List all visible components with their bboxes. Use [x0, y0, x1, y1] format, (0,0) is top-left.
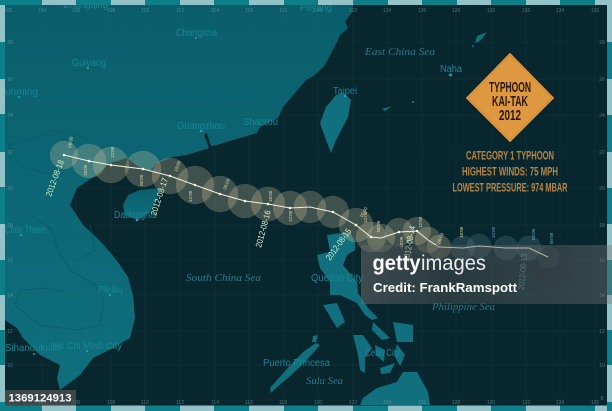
city labels: Chon Thanh: [5, 225, 46, 236]
land: Hainan: [123, 188, 160, 220]
image id tag: [5, 390, 76, 406]
weaker wind radius circles: [451, 234, 559, 268]
longitude labels: 116: [245, 8, 253, 14]
date labels: 2012-08-16: [253, 209, 273, 249]
latitude labels: 24: [599, 113, 605, 119]
sea labels: Sulu Sea: [306, 376, 343, 387]
longitude labels: 102: [4, 8, 12, 14]
longitude labels: 114: [211, 400, 219, 406]
date labels: 2012-08-17: [148, 176, 170, 217]
city markers: [18, 37, 452, 355]
latitude labels: 24: [7, 113, 13, 119]
city labels: Quezon City: [311, 273, 363, 284]
latitude labels: 22: [599, 150, 605, 156]
typhoon statistics: HIGHEST WINDS: 75 MPH: [462, 164, 558, 178]
longitude labels: 132: [522, 8, 530, 14]
longitude labels: 110: [141, 8, 149, 14]
hour labels: 12:00: [418, 216, 423, 228]
latitude labels: 12: [7, 329, 13, 335]
hour labels: 12:00: [110, 146, 115, 158]
land: mainland Asia: [0, 0, 354, 390]
watermark band: [361, 245, 612, 304]
city labels: Sihanoukville: [5, 343, 62, 354]
longitude labels: 126: [418, 8, 426, 14]
sea labels: South China Sea: [186, 273, 261, 284]
longitude labels: 128: [452, 8, 460, 14]
city labels: Taipei: [333, 86, 357, 97]
typhoon sign: [465, 52, 555, 143]
latitude labels: 18: [599, 223, 605, 229]
longitude labels: 108: [107, 8, 115, 14]
province and country borders: [7, 130, 105, 330]
longitude labels: 118: [279, 8, 287, 14]
longitude labels: 136: [591, 8, 599, 14]
hour labels: 00:00: [549, 232, 554, 244]
latitude labels: 14: [7, 293, 13, 299]
latitude labels: 8: [601, 396, 604, 402]
hour labels: 06:00: [222, 178, 231, 190]
city labels: Naha: [440, 64, 462, 75]
typhoon sign: KAI-TAK: [492, 93, 528, 110]
latitude labels: 10: [7, 363, 13, 369]
latitude labels: 16: [599, 258, 605, 264]
city labels: Puerto Princesa: [263, 358, 330, 369]
hour labels: [67, 136, 554, 248]
latitude labels: 14: [599, 293, 605, 299]
longitude labels: 114: [211, 8, 219, 14]
hour labels: 18:00: [173, 160, 182, 172]
hour labels: 18:00: [83, 164, 88, 176]
latitude labels: 28: [599, 40, 605, 46]
hour labels: 12:00: [491, 226, 496, 238]
longitude labels: 106: [72, 400, 80, 406]
longitude labels: 124: [383, 8, 391, 14]
hour labels: 06:00: [436, 232, 445, 244]
hour labels: 18:00: [268, 190, 273, 202]
sea labels: East China Sea: [364, 47, 435, 58]
hour labels: 06:00: [531, 228, 536, 240]
watermark band: images: [421, 252, 486, 275]
city labels: Cebu City: [365, 348, 400, 359]
latitude labels: 20: [599, 186, 605, 192]
sea labels: Philippine Sea: [431, 302, 495, 313]
longitude labels: 118: [279, 400, 287, 406]
latitude labels: 18: [7, 223, 13, 229]
city labels: Guiyang: [72, 58, 106, 69]
longitude labels: 134: [556, 400, 564, 406]
latitude labels: 20: [7, 186, 13, 192]
city labels: Dadonghai: [114, 210, 157, 221]
hour labels: 12:00: [363, 211, 368, 223]
latitude labels: 28: [7, 40, 13, 46]
city labels: Changsha: [176, 28, 217, 39]
city labels: [5, 0, 462, 369]
longitude labels: 116: [245, 400, 253, 406]
hour labels: 06:00: [376, 220, 381, 232]
longitude labels: 120: [314, 400, 322, 406]
longitude labels: 104: [38, 400, 46, 406]
longitude labels: 128: [452, 400, 460, 406]
longitude labels: 104: [38, 8, 46, 14]
typhoon sign: TYPHOON: [489, 79, 531, 96]
city labels: unming: [5, 87, 38, 98]
date labels: 2012-08-18: [43, 158, 66, 198]
sea labels: [186, 47, 495, 387]
latitude labels: 12: [599, 329, 605, 335]
date labels: 2012-08-14: [401, 225, 417, 262]
city labels: Poyang: [300, 3, 332, 14]
longitude labels: 136: [591, 400, 599, 406]
date labels: 2012-08-15: [324, 226, 354, 262]
longitude labels: 132: [522, 400, 530, 406]
typhoon sign: 2012: [499, 107, 521, 124]
longitude labels: 110: [141, 400, 149, 406]
watermark band: getty: [372, 252, 421, 275]
latitude labels: 26: [7, 77, 13, 83]
hour labels: 06:00: [67, 136, 74, 148]
city labels: Ho Chi Minh City: [52, 341, 122, 352]
longitude labels: 122: [349, 8, 357, 14]
longitude labels: 126: [418, 400, 426, 406]
hour labels: 12:00: [288, 210, 293, 222]
longitude labels: 120: [314, 8, 322, 14]
latitude labels: 26: [599, 77, 605, 83]
date labels: 2012-08-13: [516, 253, 529, 290]
image id tag: 1369124913: [8, 392, 72, 404]
longitude labels: 112: [176, 400, 184, 406]
city labels: Pleiku: [98, 285, 123, 296]
longitude labels: 122: [349, 400, 357, 406]
longitude labels: 134: [556, 8, 564, 14]
longitude labels: 130: [487, 8, 495, 14]
typhoon statistics: CATEGORY 1 TYPHOON: [466, 148, 554, 162]
city labels: Guangzhou: [177, 121, 225, 132]
longitude labels: 112: [176, 8, 184, 14]
latitude labels: 16: [7, 258, 13, 264]
longitude labels: 124: [383, 400, 391, 406]
hour labels: 18:00: [359, 206, 369, 218]
city labels: Shantou: [243, 117, 278, 128]
watermark band: Credit: FrankRamspott: [373, 281, 518, 295]
hour labels: 18:00: [459, 226, 464, 238]
latitude labels: 22: [7, 150, 13, 156]
date labels: [43, 158, 529, 290]
track points: [63, 154, 418, 238]
city labels: Chongqing: [63, 0, 108, 11]
storm track line: [64, 155, 548, 257]
dark storm origin circle: [534, 245, 576, 287]
storm wind radius circles: [50, 141, 451, 259]
hour labels: 06:00: [139, 174, 144, 186]
hour labels: 18:00: [399, 236, 404, 248]
land: Taiwan: [320, 93, 351, 153]
longitude labels: 108: [107, 400, 115, 406]
longitude labels: 130: [487, 400, 495, 406]
typhoon statistics: [452, 148, 568, 194]
latitude labels: 10: [599, 363, 605, 369]
longitude labels: 106: [72, 8, 80, 14]
land: Philippines and small islands: [270, 32, 487, 405]
hour labels: 12:00: [188, 190, 193, 202]
